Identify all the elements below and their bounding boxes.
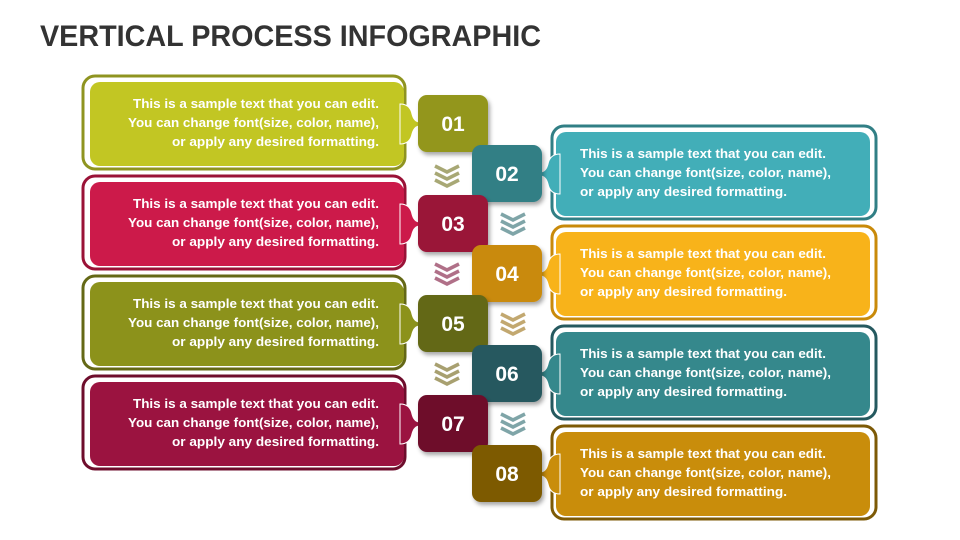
panel: step 02: You can change font(size, color, name),: [580, 165, 831, 180]
panel: step 01: You can change font(size, color, name),: [128, 115, 379, 130]
number box 03: [418, 195, 488, 252]
panel: step 06: [540, 326, 876, 419]
number box 02: [472, 145, 542, 202]
number box 04: [472, 245, 542, 302]
arrow: chevrons 03 to 04: [435, 264, 459, 284]
panel: step 05: This is a sample text that you can edit.: [133, 296, 379, 311]
panel: step 05: [83, 276, 420, 369]
number box 07: [418, 395, 488, 452]
number box 05: 05: [441, 313, 465, 336]
number box 04: 04: [495, 263, 519, 286]
number box 06: 06: [495, 363, 519, 386]
panel: step 06: or apply any desired formatting.: [580, 384, 787, 399]
panel: step 08: or apply any desired formatting.: [580, 484, 787, 499]
number box 06: [472, 345, 542, 402]
panel: step 01: This is a sample text that you can edit.: [133, 96, 379, 111]
panel: step 07: You can change font(size, color, name),: [128, 415, 379, 430]
panel: step 04: [540, 226, 876, 319]
arrow: chevrons 02 to 03: [501, 214, 525, 234]
panel: step 07: or apply any desired formatting.: [172, 434, 379, 449]
panel: step 02: or apply any desired formatting.: [580, 184, 787, 199]
title: VERTICAL PROCESS INFOGRAPHIC: [40, 20, 541, 53]
number box 01: 01: [441, 113, 465, 136]
arrow: chevrons 06 to 07: [501, 414, 525, 434]
number box 07: 07: [441, 413, 465, 436]
panel: step 04: This is a sample text that you can edit.: [580, 246, 826, 261]
panel: step 08: [540, 426, 876, 519]
panel: step 03: [83, 176, 420, 269]
number box 08: 08: [495, 463, 519, 486]
panel: step 05: You can change font(size, color, name),: [128, 315, 379, 330]
panel: step 02: [540, 126, 876, 219]
panel: step 01: [83, 76, 420, 169]
panel: step 03: or apply any desired formatting.: [172, 234, 379, 249]
panel: step 06: This is a sample text that you can edit.: [580, 346, 826, 361]
number box 01: [418, 95, 488, 152]
panel: step 03: This is a sample text that you can edit.: [133, 196, 379, 211]
panel: step 02: This is a sample text that you can edit.: [580, 146, 826, 161]
panel: step 03: You can change font(size, color, name),: [128, 215, 379, 230]
panel: step 06: You can change font(size, color, name),: [580, 365, 831, 380]
panel: step 07: [83, 376, 420, 469]
panel: step 08: This is a sample text that you can edit.: [580, 446, 826, 461]
number box 05: [418, 295, 488, 352]
number box 02: 02: [495, 163, 519, 186]
panel: step 04: or apply any desired formatting.: [580, 284, 787, 299]
panel: step 07: This is a sample text that you can edit.: [133, 396, 379, 411]
arrow: chevrons 01 to 02: [435, 166, 459, 186]
panel: step 05: or apply any desired formatting.: [172, 334, 379, 349]
panel: step 01: or apply any desired formatting.: [172, 134, 379, 149]
arrow: chevrons 05 to 06: [435, 364, 459, 384]
arrow: chevrons 04 to 05: [501, 314, 525, 334]
number box 03: 03: [441, 213, 465, 236]
panel: step 04: You can change font(size, color, name),: [580, 265, 831, 280]
number box 08: [472, 445, 542, 502]
panel: step 08: You can change font(size, color, name),: [580, 465, 831, 480]
